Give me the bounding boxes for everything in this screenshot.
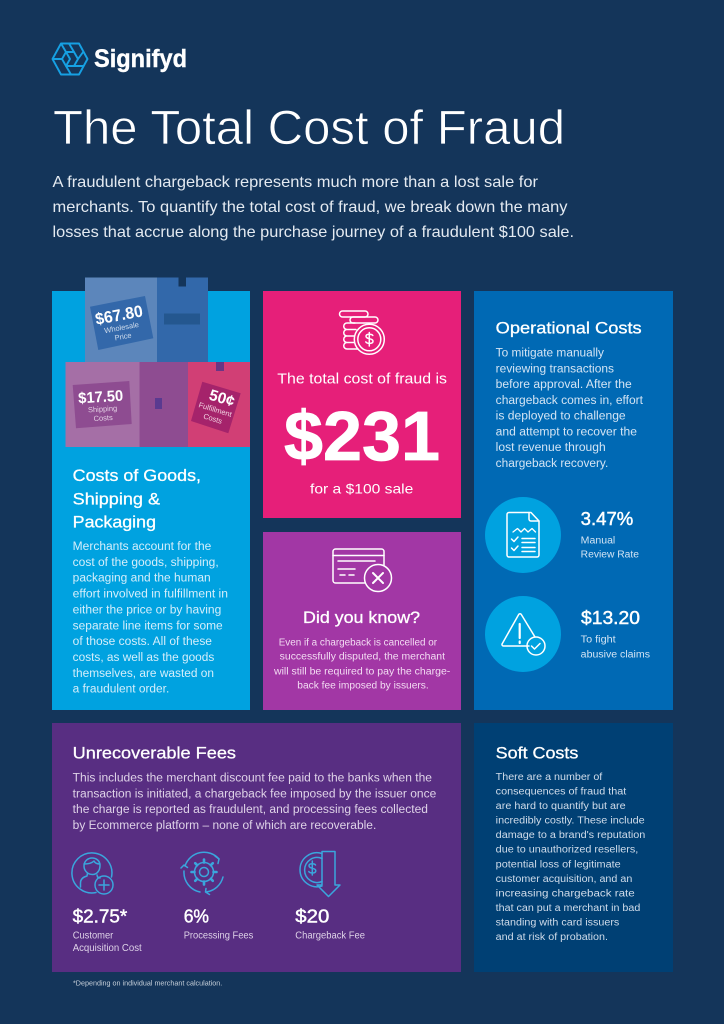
panel: unrecoverable fees (52, 723, 461, 972)
heading: costs of goods: Packaging (73, 513, 156, 532)
icon: coin with down arrow (300, 852, 340, 896)
box: shipping costs: Shipping (88, 404, 117, 414)
icon: card with cross (333, 549, 392, 592)
intro paragraph: A fraudulent chargeback represents much more than a lost sale for (52, 174, 539, 191)
body text: operational costs: chargeback recovery. (496, 458, 608, 470)
panel: total cost of fraud (263, 291, 461, 518)
fee: customer acquisition cost (72, 853, 142, 954)
body text: costs of goods: effort involved in fulfillment in (73, 589, 228, 601)
box: wholesale price: $67.80 (94, 302, 144, 329)
body text: costs of goods: Merchants account for the (73, 541, 211, 553)
heading: operational costs: Operational Costs (496, 318, 642, 337)
panel: did you know (263, 532, 461, 710)
body text: costs of goods: packaging and the human (73, 573, 211, 585)
big number: $231: $231 (284, 397, 440, 475)
body text: costs of goods: costs, as well as the goods (73, 652, 215, 664)
panel: operational costs (474, 291, 673, 710)
body text: soft costs: increasing chargeback rate (496, 888, 635, 899)
box: shipping costs: Costs (93, 413, 113, 423)
icon: user with plus (72, 853, 113, 894)
box: fulfillment costs: Fulfillment (198, 400, 234, 419)
body text: costs of goods: either the price or by having (73, 604, 221, 616)
body text: soft costs: customer acquisition, and an (496, 874, 632, 885)
fee: processing fees (181, 852, 253, 942)
body text: costs of goods: a fraudulent order. (73, 684, 169, 696)
body text: soft costs: There are a number of (496, 772, 603, 783)
fee: chargeback fee: $20 (295, 907, 329, 927)
body text: soft costs: incredibly costly. These include (496, 816, 645, 827)
box: fulfillment costs: 50¢ (207, 387, 237, 411)
body text: did you know: back fee imposed by issuers. (297, 681, 429, 692)
body text: did you know: will still be required to pay the charge- (273, 666, 450, 677)
stat: abusive claims: abusive claims (581, 649, 650, 660)
body text: operational costs: reviewing transactions (496, 363, 614, 375)
logo: Signifyd (52, 44, 187, 74)
body text: costs of goods: separate line items for some (73, 620, 223, 632)
fee: processing fees: 6% (184, 907, 209, 927)
body text: operational costs: To mitigate manually (496, 348, 604, 360)
box: shipping costs: $17.50 (78, 388, 124, 407)
body text: soft costs: standing with card issuers (496, 918, 619, 928)
panel: soft costs (474, 723, 673, 972)
box: fulfillment costs: Costs (202, 412, 223, 426)
body text: operational costs: chargeback comes in, effort (496, 395, 644, 407)
heading: unrecoverable fees: Unrecoverable Fees (73, 743, 236, 762)
body text: operational costs: is deployed to challenge (496, 411, 626, 423)
stat: abusive claims: To fight (581, 635, 616, 646)
stat: manual review rate (485, 497, 639, 573)
body text: soft costs: potential loss of legitimate (496, 859, 621, 870)
body text: unrecoverable fees: transaction is initiated, a chargeback fee imposed by the issuer once (73, 788, 436, 800)
panel: costs of goods, shipping and packaging (52, 278, 250, 710)
heading: costs of goods (73, 466, 201, 532)
box: shipping costs (66, 362, 188, 447)
body text: did you know: successfully disputed, the merchant (280, 652, 445, 663)
footnote: *Depending on individual merchant calculation. (73, 981, 222, 988)
body text: unrecoverable fees: the charge is reported as fraudulent, and processing fees collected (73, 804, 428, 816)
body text: operational costs: before approval. After the (496, 379, 632, 391)
box: fulfillment costs (188, 362, 250, 447)
brand name: Signifyd (94, 45, 187, 73)
body text: soft costs: consequences of fraud that (496, 787, 627, 798)
stat: manual review rate: 3.47% (581, 509, 633, 529)
box: wholesale price: Price (114, 331, 132, 343)
body text: costs of goods: of those costs. All of these (73, 636, 212, 648)
body text: soft costs (496, 772, 645, 943)
body text: soft costs: that can put a merchant in bad (496, 903, 640, 914)
stat: manual review rate: Review Rate (581, 550, 639, 561)
title: The Total Cost of Fraud (53, 102, 565, 155)
intro paragraph: losses that accrue along the purchase journey of a fraudulent $100 sale. (52, 224, 574, 241)
body text: operational costs (496, 348, 644, 470)
heading: soft costs: Soft Costs (496, 743, 578, 762)
box: wholesale price (85, 278, 208, 362)
fee: customer acquisition cost: $2.75* (73, 907, 127, 927)
fee: chargeback fee (295, 852, 365, 942)
icon: warning triangle with check (502, 614, 545, 655)
body text: operational costs: lost revenue through (496, 442, 606, 454)
stat: abusive claims (485, 596, 650, 672)
fee: customer acquisition cost: Customer (73, 931, 114, 942)
icon: review document (507, 512, 539, 557)
body text: did you know: Even if a chargeback is cancelled or (279, 637, 438, 648)
icon: gear with circular arrows (181, 852, 223, 894)
text: for a $100 sale: for a $100 sale (310, 480, 414, 496)
body text: unrecoverable fees (73, 773, 436, 832)
body text: costs of goods: cost of the goods, shipping, (73, 557, 219, 569)
heading: did you know: Did you know? (303, 608, 420, 627)
fee: chargeback fee: Chargeback Fee (295, 931, 365, 942)
body text: unrecoverable fees: by Ecommerce platform – none of which are recoverable. (73, 820, 376, 832)
text: total cost lead-in: The total cost of fraud is (277, 371, 447, 387)
fee: customer acquisition cost: Acquisition Cost (73, 943, 142, 954)
body text: did you know (273, 637, 450, 692)
stat: manual review rate: Manual (581, 535, 615, 546)
stat: abusive claims: $13.20 (581, 608, 640, 628)
body text: costs of goods (73, 541, 228, 696)
body text: soft costs: and at risk of probation. (496, 932, 608, 943)
icon: coin stack (340, 311, 384, 354)
body text: unrecoverable fees: This includes the merchant discount fee paid to the banks when the (73, 773, 432, 785)
intro paragraph: merchants. To quantify the total cost of fraud, we break down the many (52, 199, 568, 216)
box: wholesale price: Wholesale (104, 320, 140, 335)
heading: costs of goods: Shipping & (73, 489, 161, 508)
icon: hexagon logo mark (52, 44, 88, 74)
body text: costs of goods: themselves, are wasted on (73, 668, 214, 680)
heading: costs of goods: Costs of Goods, (73, 466, 201, 485)
body text: soft costs: due to unauthorized resellers, (496, 845, 638, 856)
intro paragraph (52, 174, 574, 241)
fee: processing fees: Processing Fees (184, 931, 253, 942)
body text: soft costs: are hard to quantify but are (496, 801, 626, 812)
body text: soft costs: damage to a brand's reputation (496, 830, 645, 841)
body text: operational costs: and attempt to recover the (496, 426, 637, 438)
